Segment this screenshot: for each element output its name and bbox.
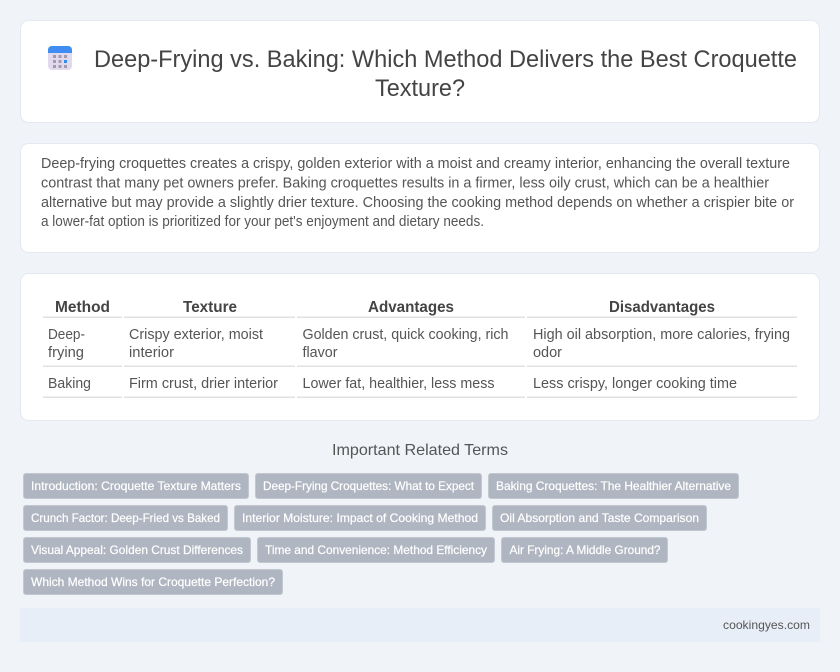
footer source: cookingyes.com [723,618,810,632]
table header [55,299,715,316]
panel: related term tags: Time and Convenience: Method Efficiency [265,543,487,557]
panel: related term tags: Deep-Frying Croquettes: What to Expect [263,479,475,493]
panel: related term tags: Oil Absorption and Taste Comparison [500,511,699,525]
title: Texture? [375,75,465,102]
title: Deep-Frying vs. Baking: Which Method Delivers the Best Croquette [94,46,797,73]
table row: deep-frying: Golden crust, quick cooking, rich [302,326,508,343]
heading: related terms: Important Related Terms [332,442,508,459]
table row: deep-frying: Deep- [48,326,85,343]
panel: related term tags: Which Method Wins for Croquette Perfection? [31,575,275,589]
table row: baking: Less crispy, longer cooking time [533,375,737,392]
table header: Disadvantages [609,299,715,316]
table row: baking: Lower fat, healthier, less mess [302,375,494,392]
panel: related term tags: Visual Appeal: Golden Crust Differences [31,543,243,557]
text block: description: Deep-frying croquettes creates a crispy, golden exterior with a moist and creamy interior, enhancing the overall texture [41,155,790,172]
table header: Method [55,299,110,316]
table row: baking [48,375,737,392]
table row: deep-frying [48,326,790,361]
panel: related term tags: Baking Croquettes: The Healthier Alternative [496,479,731,493]
text block: description: alternative but may provide a slightly drier texture. Choosing the cooking method depends on whether a crispier bite or [41,194,794,211]
table row: deep-frying: High oil absorption, more calories, frying [533,326,790,343]
table row: baking: Baking [48,375,91,392]
table row: deep-frying: odor [533,344,562,361]
table header: Advantages [368,299,454,316]
panel: comparison table card [20,274,820,420]
panel: related term tags: Air Frying: A Middle Ground? [510,543,661,557]
table header: Texture [183,299,237,316]
text block: description [41,155,794,230]
text block: description: a lower-fat option is prioritized for your pet's enjoyment and dietary needs. [41,213,484,230]
table row: deep-frying: flavor [302,344,338,361]
panel: related term tags: Introduction: Croquette Texture Matters [31,479,241,493]
table row: baking: Firm crust, drier interior [129,375,278,392]
table row: deep-frying: interior [129,344,174,361]
icon: calendar [48,46,72,70]
panel: footer [20,608,820,642]
panel: related term tags: Crunch Factor: Deep-Fried vs Baked [31,511,220,525]
panel: related term tags [24,474,738,594]
text block: description: contrast that many pet owners prefer. Baking croquettes results in a firmer, less oily crust, which can be a healthier [41,174,769,192]
panel: related term tags: Interior Moisture: Impact of Cooking Method [242,511,478,525]
table row: deep-frying: Crispy exterior, moist [129,326,264,343]
table row: deep-frying: frying [48,344,84,361]
title [94,46,797,102]
panel: description card [20,144,820,252]
panel: title card [20,20,820,122]
